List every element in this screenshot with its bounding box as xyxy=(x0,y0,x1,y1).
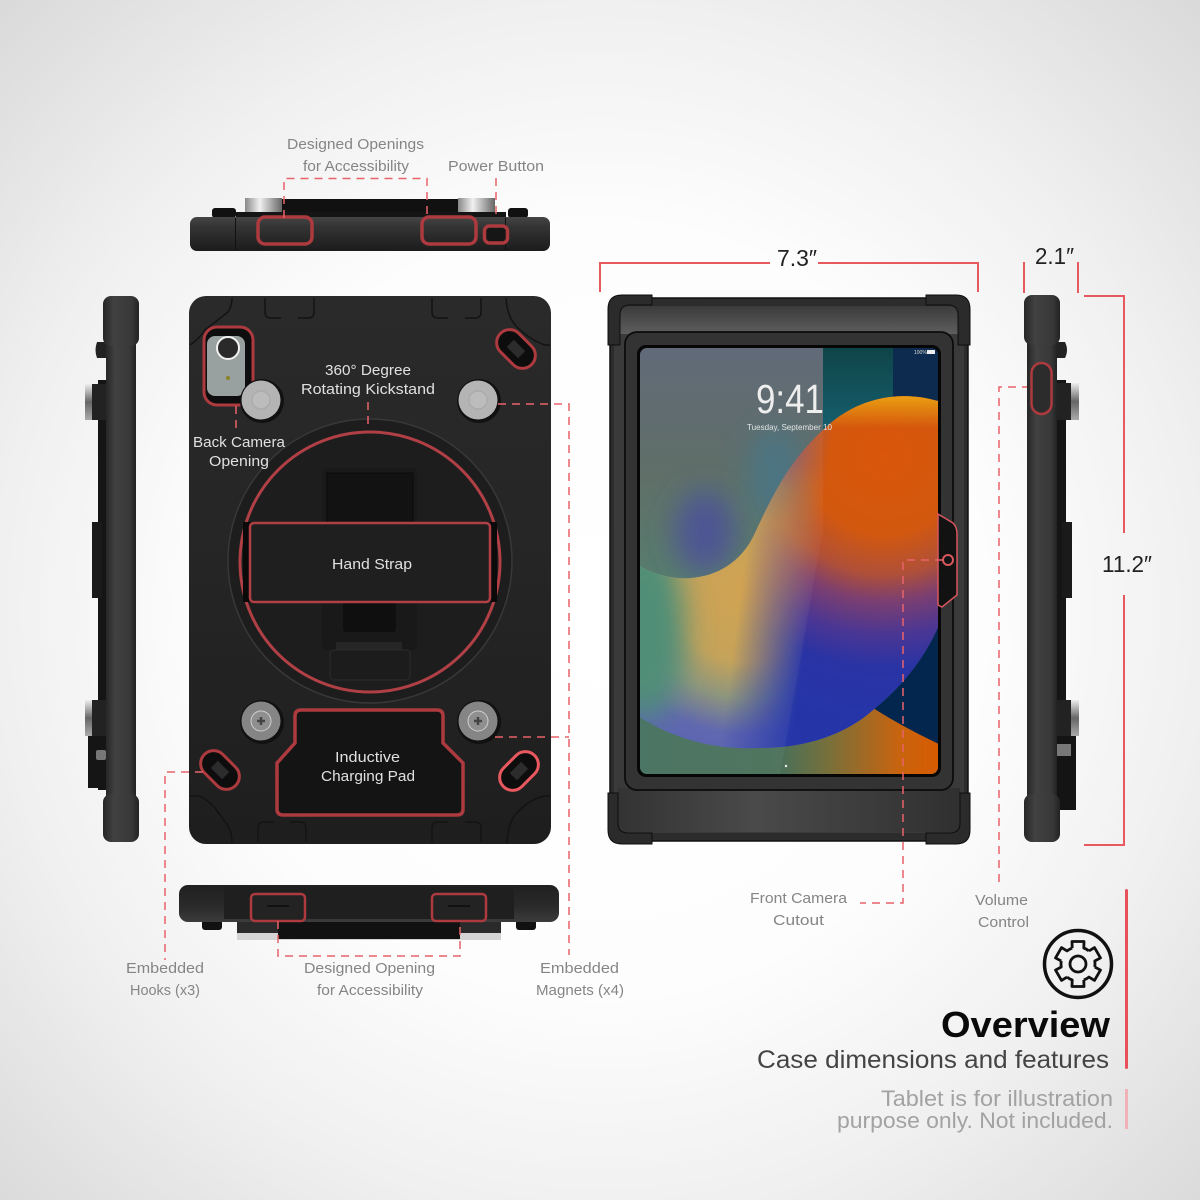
dimension: depth 2.1 in xyxy=(1024,243,1078,293)
inductive charging pad xyxy=(277,710,463,815)
label: front camera cutout: Cutout xyxy=(773,912,825,929)
volume control highlight xyxy=(1032,363,1052,414)
label: designed openings top: for Accessibility xyxy=(303,158,410,175)
label: embedded magnets: Magnets (x4) xyxy=(536,982,624,999)
back view of case xyxy=(189,296,551,844)
screws xyxy=(240,379,501,744)
openings highlights (top) xyxy=(258,217,508,244)
lock screen time and date: 100% xyxy=(914,350,927,356)
front camera dashed callout xyxy=(860,560,943,903)
label: embedded hooks xyxy=(126,960,204,999)
label: embedded magnets xyxy=(536,960,624,999)
disclaimer note: purpose only. Not included. xyxy=(837,1108,1113,1133)
dimension: width 7.3 in: 7.3″ xyxy=(777,245,817,271)
lock screen time and date xyxy=(747,350,935,767)
label: 360 degree rotating kickstand xyxy=(301,362,435,398)
dimension: width 7.3 in xyxy=(600,245,978,292)
camera opening xyxy=(204,327,253,405)
label: designed opening bottom xyxy=(304,960,435,999)
left side view of case xyxy=(85,296,139,842)
embedded hooks xyxy=(195,324,544,796)
label: back camera opening: Back Camera xyxy=(193,434,286,451)
subtitle: Case dimensions and features xyxy=(757,1046,1109,1074)
label: back camera opening xyxy=(193,434,286,470)
front camera cutout xyxy=(938,514,957,607)
disclaimer note: Tablet is for illustration xyxy=(881,1086,1113,1111)
tablet wallpaper xyxy=(640,348,938,774)
kickstand disc xyxy=(228,419,512,703)
label: back camera opening: Opening xyxy=(209,453,269,470)
dimension: height 11.2 in: 11.2″ xyxy=(1102,551,1152,577)
corner bumper lines xyxy=(190,298,550,843)
label: volume control: Volume xyxy=(975,892,1028,909)
corner bumpers xyxy=(608,295,970,844)
title accent bar xyxy=(1125,889,1128,1069)
right side view of case xyxy=(1024,295,1079,842)
lock screen time and date: Tuesday, September 10 xyxy=(747,422,832,432)
label: volume control xyxy=(975,892,1029,931)
label: front camera cutout xyxy=(750,890,848,929)
note accent bar xyxy=(1125,1089,1128,1129)
front view of case with tablet xyxy=(605,295,970,844)
top edge view of case xyxy=(190,198,550,251)
dimension: depth 2.1 in: 2.1″ xyxy=(1035,243,1074,269)
label: 360 degree rotating kickstand: Rotating Kickstand xyxy=(301,381,435,398)
callout dashed lines xyxy=(165,178,1030,960)
inductive charging pad: Charging Pad xyxy=(321,768,415,785)
label: embedded hooks: Embedded xyxy=(126,960,204,977)
label: designed openings top: Designed Openings xyxy=(287,136,424,153)
icon: gear in circle xyxy=(1044,930,1112,998)
lock screen time and date: 9:41 xyxy=(756,376,824,422)
label: designed opening bottom: for Accessibility xyxy=(317,982,424,999)
hand strap: Hand Strap xyxy=(332,556,412,573)
disclaimer note xyxy=(837,1086,1113,1133)
bottom edge view of case xyxy=(179,885,559,940)
label: designed openings top xyxy=(287,136,424,175)
hand strap xyxy=(250,523,490,602)
label: power button: Power Button xyxy=(448,158,544,175)
label: volume control: Control xyxy=(978,914,1029,931)
label: designed opening bottom: Designed Opening xyxy=(304,960,435,977)
label: 360 degree rotating kickstand: 360° Degree xyxy=(325,362,411,379)
label: embedded magnets: Embedded xyxy=(540,960,619,977)
dimension: height 11.2 in xyxy=(1084,296,1152,845)
title: Overview xyxy=(941,1004,1111,1045)
wallpaper wave xyxy=(640,396,938,748)
openings highlights (bottom) xyxy=(251,894,486,921)
inductive charging pad: Inductive xyxy=(335,749,400,766)
label: embedded hooks: Hooks (x3) xyxy=(130,982,200,999)
label: front camera cutout: Front Camera xyxy=(750,890,848,907)
